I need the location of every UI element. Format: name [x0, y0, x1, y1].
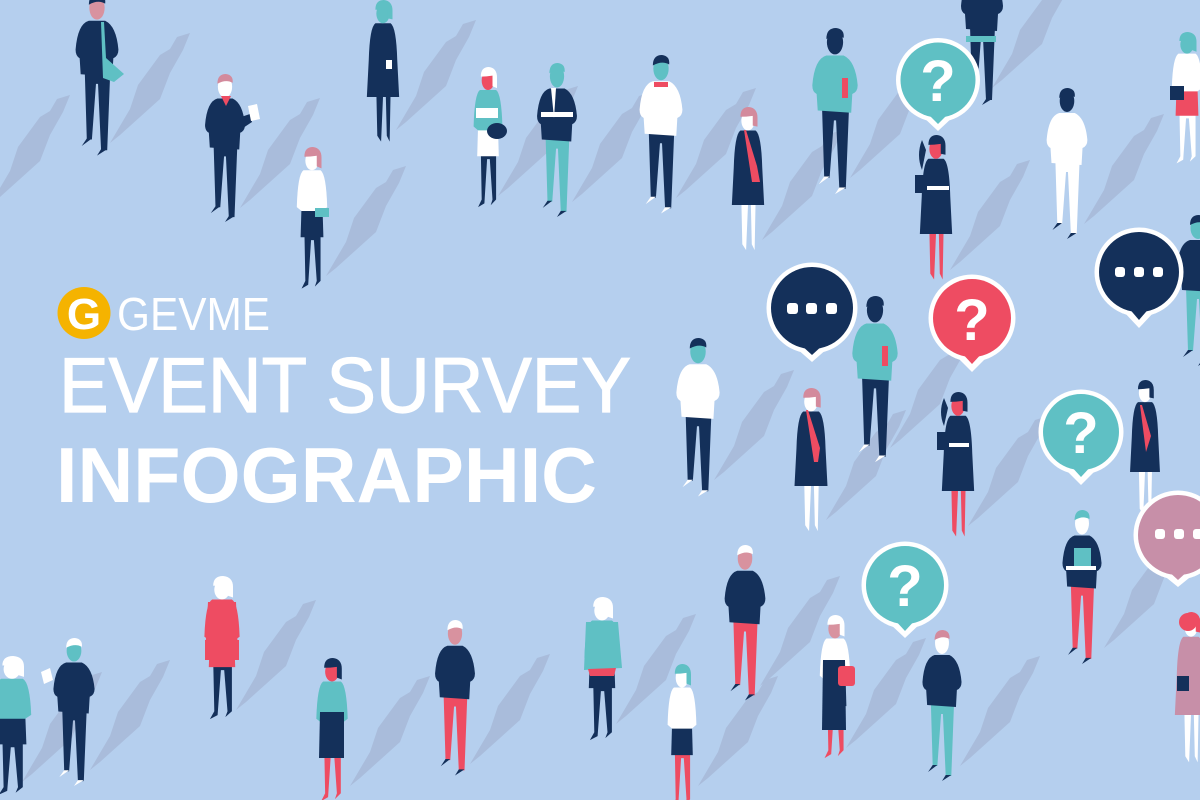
person 28: woman with teal top [316, 658, 348, 800]
person 7: man in white top [640, 55, 682, 214]
person 26: woman in teal coat [584, 597, 622, 740]
bubble: teal question top: ? [920, 49, 956, 114]
person 25: woman at bottom with red legs [668, 664, 696, 800]
title line 1: EVENT SURVEY [59, 341, 631, 429]
person 15: man in white top [676, 338, 720, 497]
person 1: man with teal bag [76, 0, 124, 156]
person 6: man in navy with teal trousers [537, 63, 577, 217]
person 10: woman with ponytail [915, 135, 952, 280]
person 21: woman in pink dress [1175, 612, 1200, 762]
person 27: man with red trousers [435, 620, 475, 776]
person 12: figure in white [1047, 88, 1087, 239]
bubble: navy dots right [1094, 228, 1184, 328]
person 3: woman in white blouse [297, 147, 329, 289]
logo: GEVME: GEVME [117, 288, 270, 340]
person 5: woman with handbag [474, 67, 507, 207]
person 22: man with red trousers [725, 545, 765, 701]
logo: GEVME [58, 287, 270, 340]
bubble: navy dots [766, 262, 858, 362]
person 29: woman in red coat [204, 576, 240, 719]
person 11: man at top edge [961, 0, 1003, 105]
person 18: woman with ponytail [937, 392, 974, 537]
bubble: red question [928, 274, 1016, 372]
title line 2: INFOGRAPHIC [56, 431, 597, 519]
person 2: man with paper [205, 74, 260, 222]
bubble: red question: ? [954, 288, 990, 353]
person 23: woman with red handbag [820, 615, 855, 758]
logo: GEVME: G [67, 290, 101, 339]
person 24: man with teal trousers [922, 630, 962, 781]
person 30: man with paper and white hair [41, 638, 95, 786]
bubble: pink dots [1134, 490, 1200, 587]
person 16: woman in navy dress [795, 388, 827, 531]
person 31: woman in teal coat at left edge [0, 656, 31, 795]
person 4: woman in navy [367, 0, 399, 142]
person 19: woman in navy dress right [1130, 380, 1160, 514]
bubble: teal question right: ? [1063, 401, 1099, 466]
person 8: woman in navy dress [732, 107, 764, 250]
bubble: teal question right [1038, 390, 1124, 485]
person 17: man in teal with book [852, 296, 898, 462]
bubble: teal question bottom [862, 542, 948, 638]
person 14: man clipped at right edge [1177, 215, 1200, 366]
person 20: man with red trousers [1062, 510, 1102, 664]
bubble: teal question bottom: ? [887, 554, 923, 619]
bubble: teal question top [896, 38, 980, 131]
person 13: woman at right edge [1170, 32, 1200, 163]
person 9: man in teal with book [812, 28, 858, 194]
